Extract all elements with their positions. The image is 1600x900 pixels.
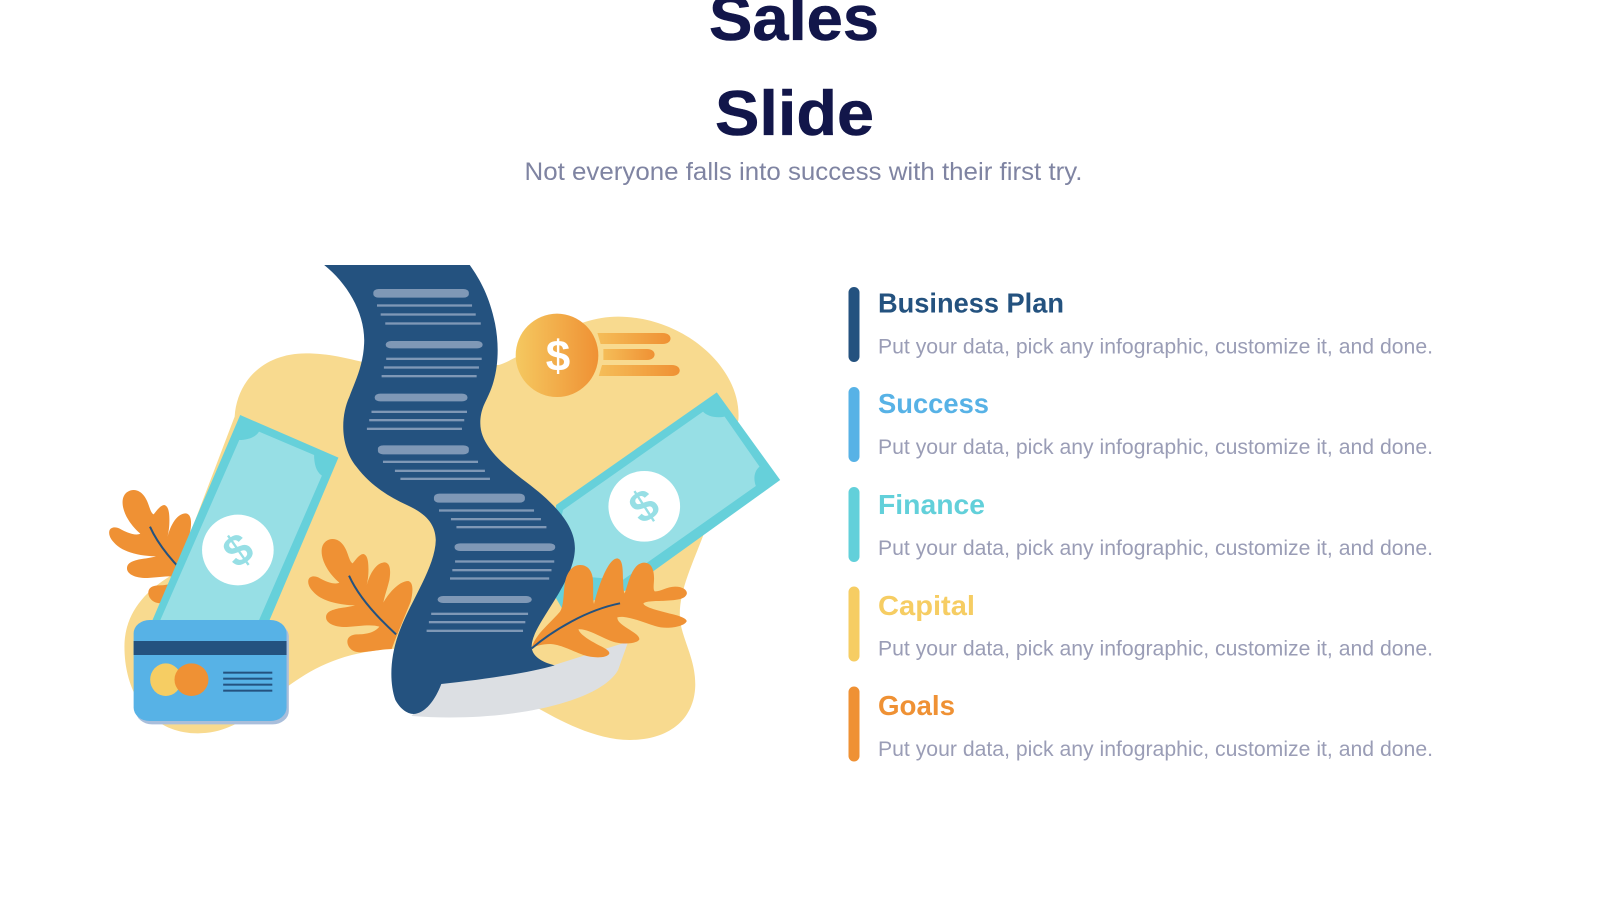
left banknote dollar sign: $ (214, 523, 262, 578)
title: Slide (715, 79, 874, 149)
middle leaf (308, 539, 412, 652)
item: Capital (848, 586, 1433, 662)
item: Success (848, 387, 1433, 462)
title (709, 0, 879, 149)
coin with speed bars (516, 314, 680, 397)
item: Finance: Put your data, pick any infographic, customize it, and done. (878, 536, 1433, 560)
right banknote (549, 392, 780, 610)
item: Goals (848, 686, 1433, 762)
credit card (134, 620, 289, 724)
item: Capital: Capital (878, 590, 975, 621)
item: Finance: Finance (878, 489, 985, 520)
subtitle: Not everyone falls into success with their first try. (524, 158, 1082, 186)
item: Business Plan: Business Plan (878, 288, 1064, 318)
receipt (324, 265, 575, 714)
right banknote dollar sign: $ (621, 479, 668, 534)
item: Success: Put your data, pick any infographic, customize it, and done. (878, 435, 1433, 459)
item: Finance (848, 487, 1433, 562)
illustration (109, 265, 780, 740)
item: Goals: Put your data, pick any infographic, customize it, and done. (878, 737, 1433, 761)
yellow background blob (124, 317, 739, 740)
item: Capital: Put your data, pick any infographic, customize it, and done. (878, 636, 1433, 660)
coin dollar sign: $ (546, 332, 570, 381)
receipt curl shadow (411, 642, 628, 718)
left banknote (150, 415, 338, 627)
item: Business Plan (848, 287, 1433, 362)
item: Success: Success (878, 388, 989, 419)
left leaf (109, 490, 213, 603)
right leaf (532, 558, 687, 657)
item: Business Plan: Put your data, pick any infographic, customize it, and done. (878, 334, 1433, 358)
item: Goals: Goals (878, 690, 955, 721)
